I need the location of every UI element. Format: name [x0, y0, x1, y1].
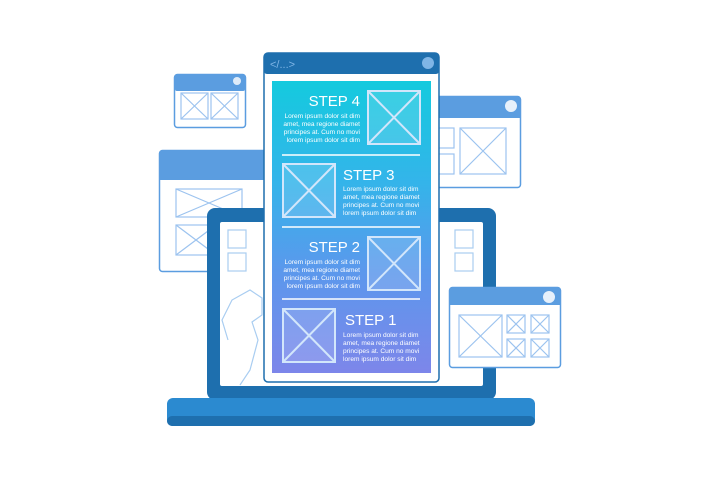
step 2: principes at. Cum no movi	[284, 275, 361, 282]
step 2: lorem ipsum dolor sit dim	[287, 283, 360, 290]
window: left large	[160, 150, 270, 272]
laptop	[167, 208, 535, 426]
step 1	[283, 309, 420, 363]
window: right top	[430, 96, 520, 188]
window: bottom right	[450, 288, 560, 368]
step 1: STEP 1	[345, 312, 396, 329]
step 3: STEP 3	[343, 167, 394, 184]
step 2: STEP 2	[309, 239, 360, 256]
step 2: Lorem ipsum dolor sit dim	[284, 259, 360, 266]
step 3	[283, 164, 420, 217]
step 4: lorem ipsum dolor sit dim	[287, 137, 360, 144]
step 3: amet, mea regione diamet	[343, 194, 420, 201]
phone panel	[264, 53, 439, 382]
close icon	[422, 57, 434, 69]
step 2	[283, 237, 420, 290]
step 4: principes at. Cum no movi	[284, 129, 361, 136]
step 1: Lorem ipsum dolor sit dim	[343, 332, 419, 339]
step 3: principes at. Cum no movi	[343, 202, 420, 209]
step 4: amet, mea regione diamet	[283, 121, 360, 128]
step 2: amet, mea regione diamet	[283, 267, 360, 274]
window: top left small	[174, 74, 246, 128]
step 4	[283, 91, 420, 144]
step 4: STEP 4	[309, 93, 360, 110]
step 3: Lorem ipsum dolor sit dim	[343, 186, 419, 193]
step 1: amet, mea regione diamet	[343, 340, 420, 347]
step 1: lorem ipsum dolor sit dim	[343, 356, 417, 363]
step 4: Lorem ipsum dolor sit dim	[284, 113, 360, 120]
step 1: principes at. Cum no movi	[343, 348, 420, 355]
header code tag: </...>	[270, 59, 295, 71]
step 3: lorem ipsum dolor sit dim	[343, 210, 417, 217]
